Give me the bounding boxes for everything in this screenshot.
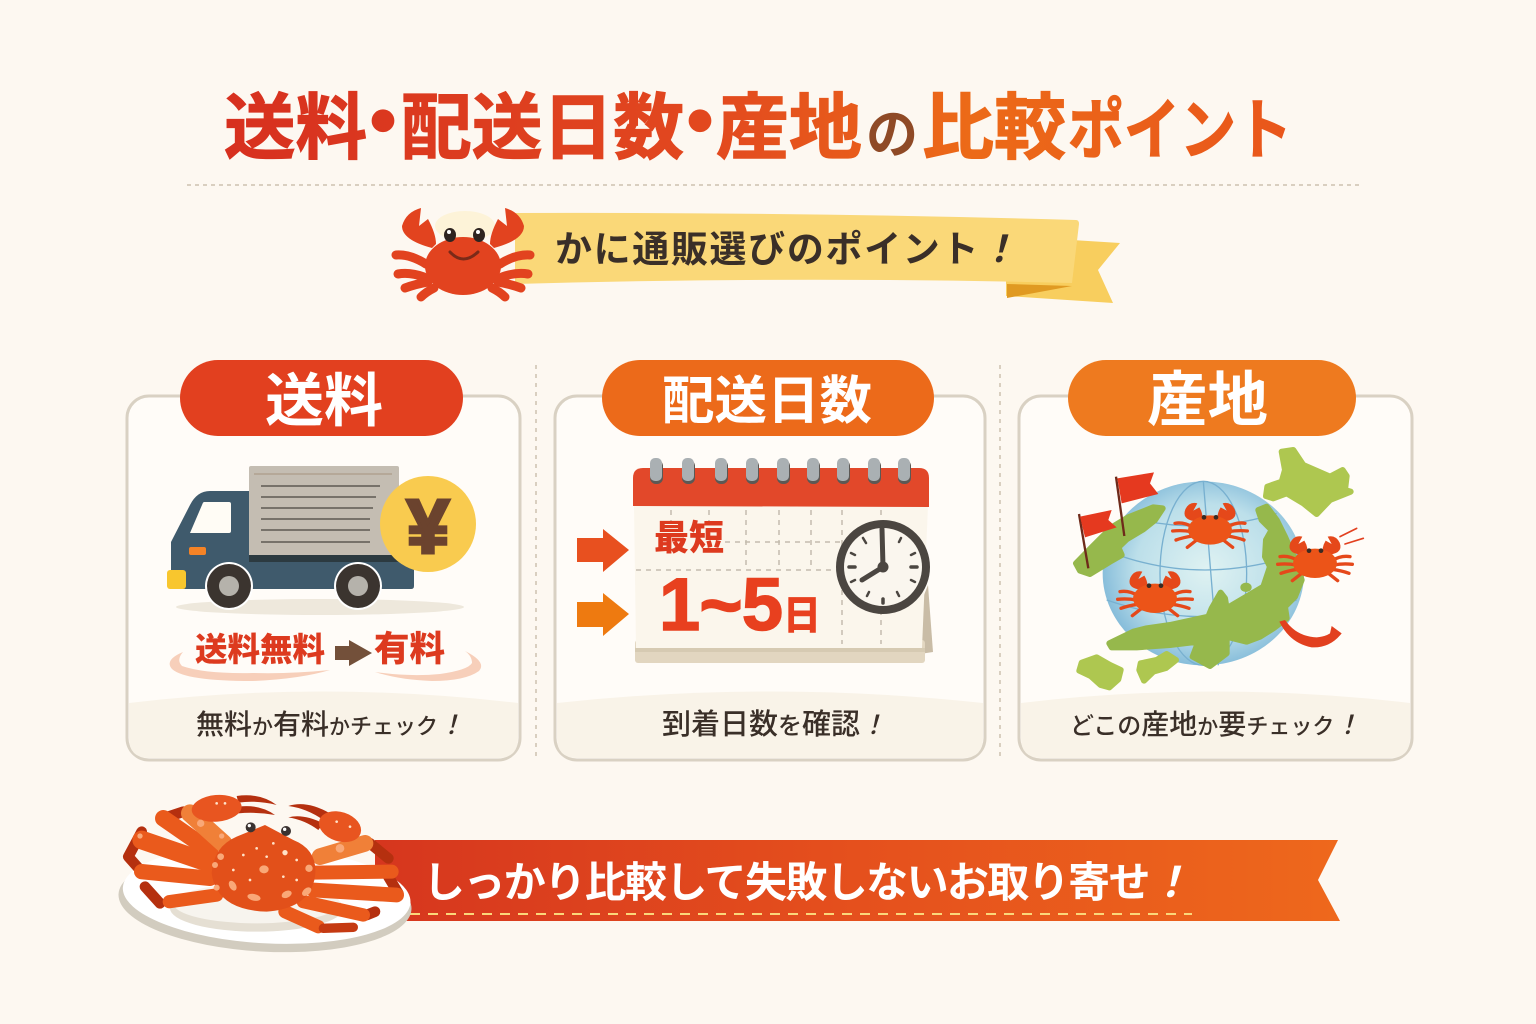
icon: delivery truck (167, 466, 476, 615)
heading pill: delivery days (602, 359, 934, 436)
title: 送料 (224, 89, 367, 169)
bottom banner (375, 840, 1340, 921)
label: shortest: 最短 (654, 510, 724, 561)
swoosh and fee labels: 送料無料 (195, 623, 325, 671)
illustration: crab on plate (116, 793, 414, 959)
swoosh and fee labels: 有料 (374, 621, 445, 672)
heading pill: origin (1068, 352, 1356, 439)
curved red arrow (1279, 528, 1363, 647)
crab body (137, 802, 351, 912)
icon: yen coin (380, 476, 476, 572)
caption: delivery days: 到着日数を確認！ (662, 701, 886, 743)
icon: calendar (633, 458, 933, 663)
heading pill: delivery days: 配送日数 (662, 359, 872, 434)
subtitle ribbon (515, 213, 1120, 303)
ribbon text: かに通販選びのポイント！ (555, 219, 1017, 273)
swoosh and fee labels (170, 621, 481, 681)
icon: arrow (577, 529, 629, 572)
label: 1 to 5 days: 日 (783, 583, 821, 641)
icon: yen coin: ¥ (407, 485, 449, 570)
icon: arrow (577, 593, 629, 636)
title: 産地 (716, 89, 862, 169)
title: ・ (658, 77, 742, 171)
flags (1079, 472, 1158, 568)
heading pill: shipping (180, 354, 463, 438)
title: ・ (341, 77, 425, 171)
crabs (1118, 503, 1352, 616)
heading pill: origin: 産地 (1147, 352, 1268, 439)
caption: origin: どこの産地か要チェック！ (1070, 703, 1360, 743)
title: ポイント (1068, 93, 1292, 167)
caption: shipping: 無料か有料かチェック！ (196, 703, 464, 743)
panel: origin (1019, 352, 1412, 760)
banner text: しっかり比較して失敗しないお取り寄せ！ (423, 849, 1191, 910)
title: 配送日数 (401, 89, 684, 169)
icon: globe with map and crabs (1076, 450, 1363, 687)
panel: shipping (127, 354, 520, 760)
crab claws (191, 793, 365, 847)
icon: mascot crab (396, 208, 530, 297)
icon: clock (840, 524, 926, 610)
map shapes (1076, 450, 1351, 687)
label: 1 to 5 days: 1~5 (659, 563, 783, 646)
heading pill: shipping: 送料 (265, 354, 383, 438)
title: 比較 (922, 89, 1066, 169)
title: の (866, 105, 918, 165)
title (224, 77, 1292, 171)
crab legs (128, 812, 398, 928)
panel: delivery days (555, 359, 985, 760)
